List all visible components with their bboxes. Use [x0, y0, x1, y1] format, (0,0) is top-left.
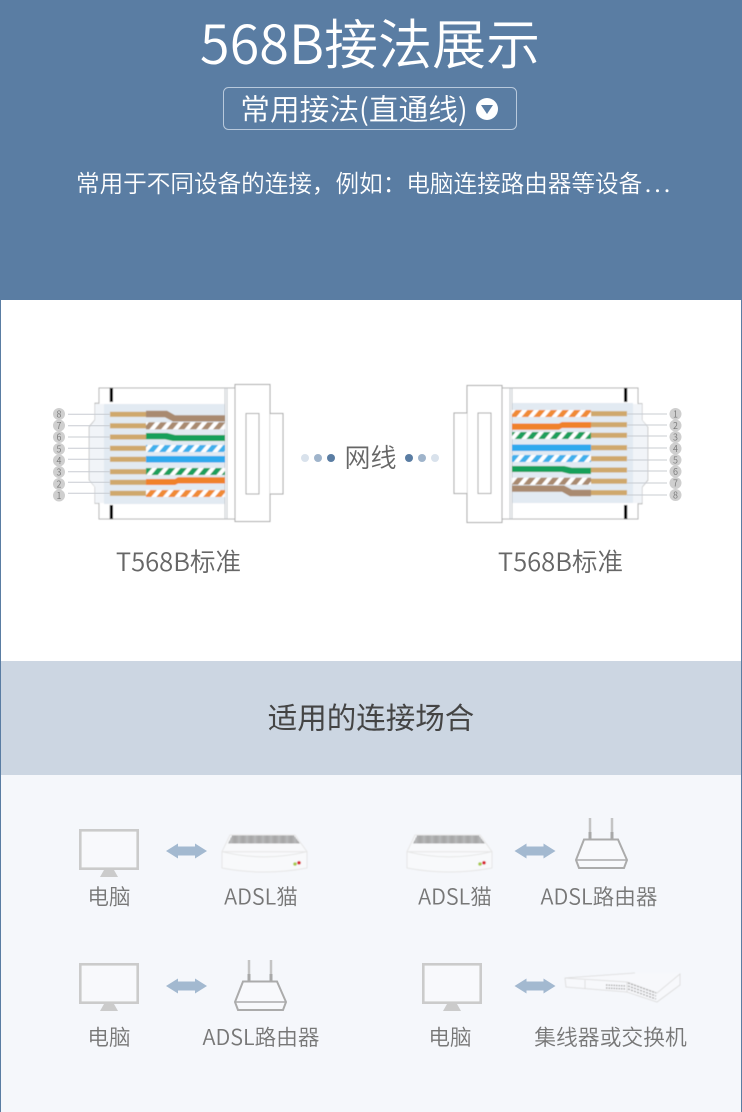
right pin numbers: 4 [673, 442, 678, 455]
right connector [454, 386, 682, 522]
left pin numbers: 4 [57, 454, 62, 467]
left pin numbers: 2 [57, 478, 62, 490]
section heading band [0, 661, 742, 775]
scenario: ADSL modem to router: ADSL猫 [418, 880, 492, 912]
scenario: PC to switch: 电脑 [428, 1021, 472, 1052]
scenario: PC to router: ADSL路由器 [203, 1021, 319, 1052]
scenario: PC to router: 电脑 [87, 1021, 131, 1052]
icon: network switch [565, 973, 680, 1002]
left pin numbers: 6 [57, 430, 62, 444]
cable label with dots: 网线 [344, 438, 397, 475]
header panel [0, 0, 742, 300]
scenario: ADSL modem to router: ADSL路由器 [541, 880, 657, 912]
left standard label: T568B标准 [116, 542, 241, 579]
scenario: PC to router [80, 960, 319, 1052]
scenario: PC to switch [423, 964, 687, 1052]
icon: monitor [80, 964, 138, 1011]
icon: router [235, 960, 286, 1010]
left connector [53, 384, 283, 522]
icon: monitor [80, 830, 138, 877]
icon: ADSL modem [222, 835, 307, 872]
right pin numbers: 7 [673, 476, 678, 490]
dropdown badge: 常用接法(直通线) [240, 86, 468, 129]
subtitle ellipsis [646, 189, 668, 192]
left pin numbers: 5 [57, 442, 62, 456]
icon: double arrow [514, 844, 556, 858]
right pin numbers: 8 [673, 488, 678, 502]
right pin numbers: 6 [673, 465, 678, 478]
section heading: 适用的连接场合 [268, 696, 474, 738]
title: 568B接法展示 [200, 1, 540, 80]
subtitle: 常用于不同设备的连接，例如：电脑连接路由器等设备 [76, 165, 642, 199]
right standard label: T568B标准 [498, 542, 623, 579]
icon: ADSL modem [407, 835, 492, 872]
panel: connection scenarios [0, 775, 742, 1112]
scenario: PC to ADSL modem: 电脑 [87, 880, 131, 912]
left pin numbers: 7 [57, 419, 62, 432]
scenario: PC to ADSL modem: ADSL猫 [224, 880, 298, 912]
left pin numbers: 1 [57, 489, 62, 502]
scenario: ADSL modem to router [407, 818, 657, 912]
right pin numbers: 2 [673, 419, 678, 432]
right pin numbers: 1 [673, 408, 678, 420]
icon: double arrow [514, 978, 556, 994]
scenario: PC to ADSL modem [80, 830, 307, 912]
icon: monitor [423, 964, 481, 1011]
icon: double arrow [166, 844, 207, 858]
panel: wiring diagram [0, 300, 742, 661]
cable label with dots [301, 438, 439, 475]
scenario: PC to switch: 集线器或交换机 [534, 1021, 687, 1052]
page side borders [0, 300, 742, 1112]
right pin numbers: 5 [673, 454, 678, 466]
left pin numbers: 8 [57, 408, 62, 420]
icon: double arrow [166, 978, 207, 994]
left pin numbers [53, 408, 110, 502]
right pin numbers: 3 [673, 430, 678, 444]
left pin numbers: 3 [57, 466, 62, 478]
icon: router [576, 818, 627, 868]
right pin numbers [627, 408, 682, 502]
